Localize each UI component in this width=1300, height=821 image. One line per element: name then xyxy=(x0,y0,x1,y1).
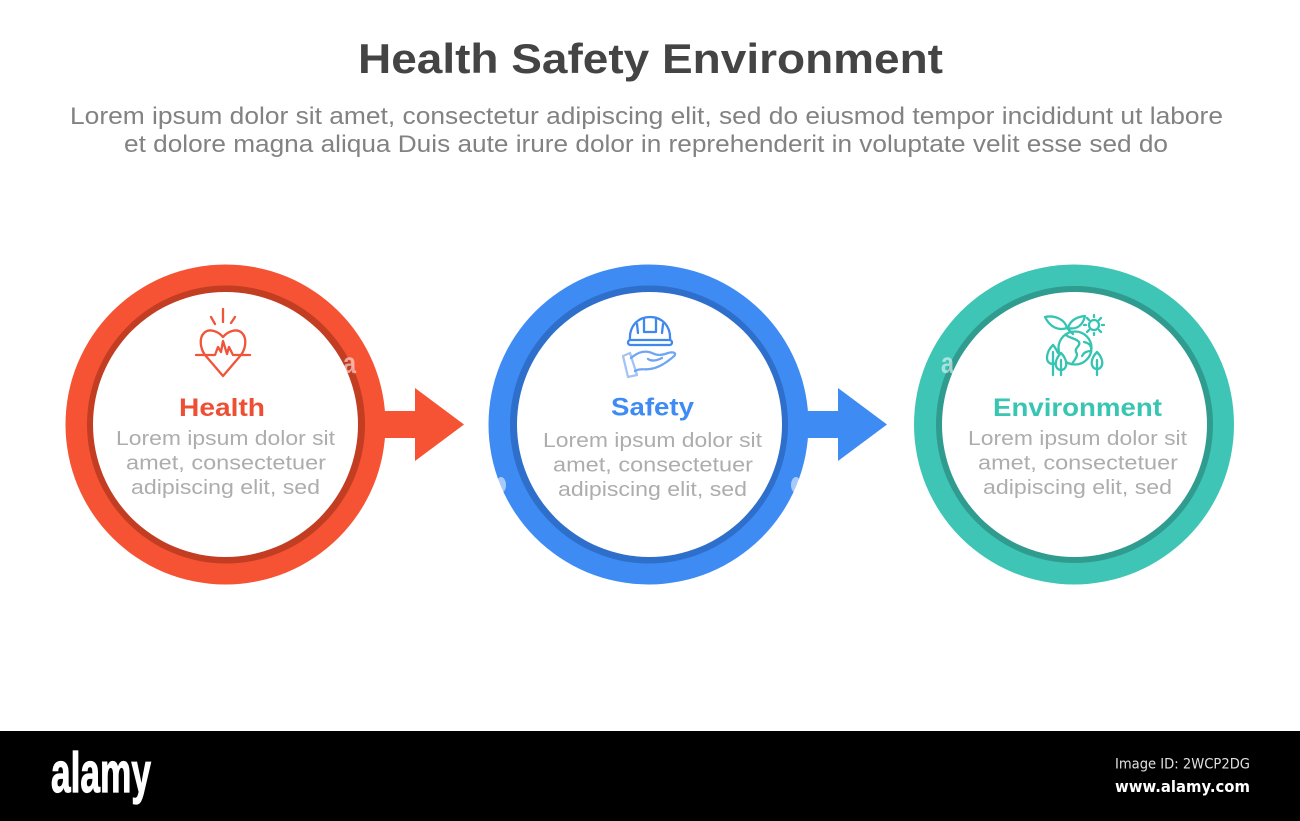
icon: helmet and hand xyxy=(623,317,675,377)
footer logo: alamy xyxy=(51,741,151,805)
text block: environment: amet, consectetuer xyxy=(978,452,1178,474)
intro text xyxy=(70,103,1223,158)
arrow: safety to environment xyxy=(798,388,887,461)
text block: environment: adipiscing elit, sed xyxy=(983,476,1172,499)
environment ring xyxy=(914,264,1234,584)
text block: health xyxy=(116,427,335,499)
intro text: et dolore magna aliqua Duis aute irure dolor in reprehenderit in voluptate velit esse sed do xyxy=(124,131,1168,158)
intro text: Lorem ipsum dolor sit amet, consectetur adipiscing elit, sed do eiusmod tempor incididunt ut labore xyxy=(70,103,1223,130)
text block: health: amet, consectetuer xyxy=(126,452,326,474)
text block: safety: adipiscing elit, sed xyxy=(558,478,747,501)
text block: safety xyxy=(543,429,762,501)
text block: health: Lorem ipsum dolor sit xyxy=(116,427,335,450)
safety ring xyxy=(488,264,808,584)
arrow: health to safety xyxy=(375,388,464,461)
icon: globe, leaves and sun xyxy=(1045,315,1104,375)
watermark letter: health ring: a xyxy=(343,347,356,380)
text block: environment xyxy=(968,427,1187,499)
title: Health Safety Environment xyxy=(358,35,943,82)
watermark letter: environment ring: a xyxy=(941,347,954,380)
panel: health xyxy=(66,264,464,584)
footer image id: Image ID: 2WCP2DG xyxy=(1115,756,1250,772)
heading: safety: Safety xyxy=(611,394,694,422)
heading: environment: Environment xyxy=(993,394,1163,422)
text block: environment: Lorem ipsum dolor sit xyxy=(968,427,1187,450)
icon: heart with pulse xyxy=(196,309,250,376)
text block: safety: Lorem ipsum dolor sit xyxy=(543,429,762,452)
footer bar xyxy=(0,731,1300,821)
panel: environment xyxy=(914,264,1234,584)
heading: health: Health xyxy=(179,394,265,422)
watermark marks: safety ring xyxy=(496,477,801,493)
text block: safety: amet, consectetuer xyxy=(553,454,753,476)
text block: health: adipiscing elit, sed xyxy=(131,476,320,499)
footer url: www.alamy.com xyxy=(1115,777,1250,796)
health ring xyxy=(66,264,386,584)
panel: safety xyxy=(488,264,887,584)
